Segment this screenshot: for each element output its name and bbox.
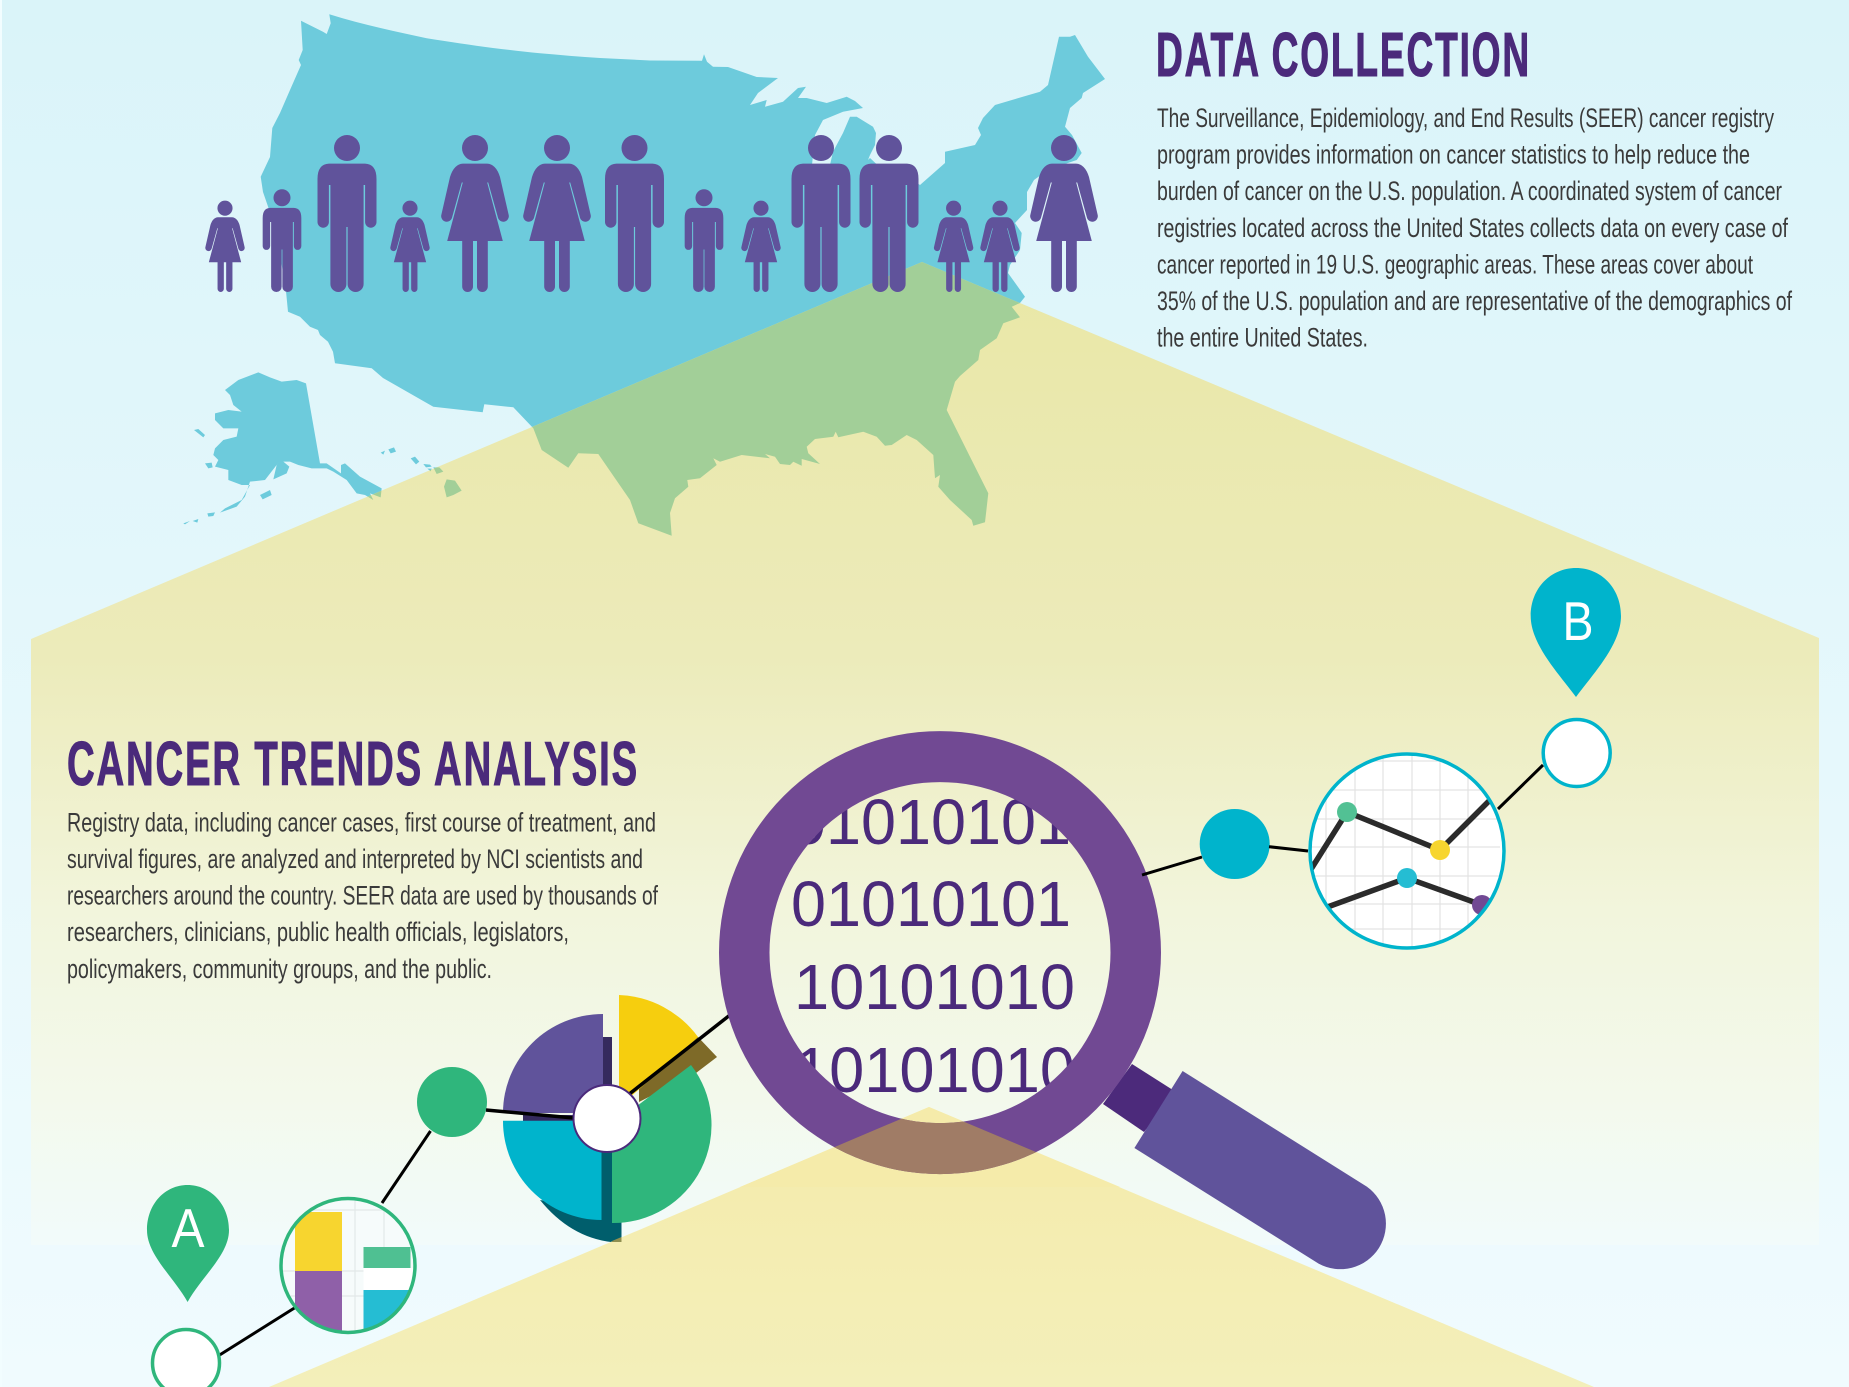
- icon: girl: [390, 201, 430, 292]
- icon: map pin A: A: [172, 1197, 205, 1259]
- icon: map pin A: [147, 1185, 229, 1302]
- connector line: line chart to node B: [1498, 765, 1543, 809]
- text block: data collection description: the entire United States.: [1157, 323, 1368, 353]
- text block: data collection description: [1157, 103, 1792, 353]
- icon: man: [860, 135, 918, 292]
- icon: man: [318, 135, 376, 292]
- node: end point B: [1543, 720, 1610, 786]
- node: teal: [1200, 809, 1270, 879]
- icon: man: [792, 135, 850, 292]
- icon: boy: [263, 189, 301, 292]
- icon: girl: [205, 201, 245, 292]
- map of the United States: [183, 14, 1105, 536]
- text block: cancer trends description: [67, 808, 658, 984]
- icon: woman: [523, 135, 591, 292]
- icon: girl: [980, 201, 1020, 292]
- icon: boy: [685, 189, 723, 292]
- text block: cancer trends description: researchers around the country. SEER data are used by thousands of: [67, 881, 658, 911]
- icon: map pin B: [1531, 568, 1621, 697]
- connector line: node A to bar chart: [218, 1307, 296, 1356]
- panel: lower hexagon: [269, 1107, 1594, 1387]
- panel: cancer trends background hexagon: [31, 262, 1819, 1245]
- text block: cancer trends description: survival figures, are analyzed and interpreted by NCI scientists and: [67, 844, 643, 874]
- connector line: green node to pie: [486, 1110, 574, 1118]
- lower hexagon apex over digits: [740, 1107, 1120, 1187]
- icon: magnifying glass: [719, 731, 1386, 1269]
- chart: line chart in circle: [1300, 750, 1504, 950]
- icon: map pin B: B: [1562, 590, 1594, 652]
- icon: girl: [741, 201, 781, 292]
- node: green: [417, 1067, 487, 1137]
- binary digits inside lens: [791, 786, 1075, 1106]
- map portion overlapped by hexagon: [368, 262, 1020, 536]
- heading: data collection: DATA COLLECTION: [1156, 21, 1531, 90]
- binary digits inside lens: 10101010: [794, 1034, 1075, 1106]
- icon: girl: [934, 201, 973, 292]
- icon: woman: [1030, 135, 1098, 292]
- text block: cancer trends description: Registry data, including cancer cases, first course of treatment, and: [67, 808, 656, 838]
- connector line: teal node to line chart: [1269, 847, 1308, 851]
- connector line: pie to magnifier: [628, 1015, 730, 1095]
- connector line: bar chart to green node: [382, 1131, 430, 1203]
- binary digits inside lens: 01010101: [791, 786, 1071, 858]
- connector line: magnifier to teal node: [1142, 857, 1202, 875]
- row of people icons: [205, 135, 1098, 292]
- binary digits inside lens: 01010101: [791, 868, 1071, 940]
- icon: woman: [441, 135, 509, 292]
- binary digits inside lens: 10101010: [794, 951, 1075, 1023]
- chart: exploded pie: [503, 995, 717, 1242]
- pie centre circle: [574, 1085, 640, 1152]
- text block: cancer trends description: researchers, clinicians, public health officials, legislators,: [67, 917, 569, 947]
- node: start point A: [152, 1330, 220, 1387]
- chart: bar chart in circle: [279, 1196, 417, 1334]
- text block: cancer trends description: policymakers, community groups, and the public.: [67, 954, 492, 984]
- heading: cancer trends analysis: CANCER TRENDS ANALYSIS: [67, 730, 639, 799]
- icon: man: [605, 135, 664, 292]
